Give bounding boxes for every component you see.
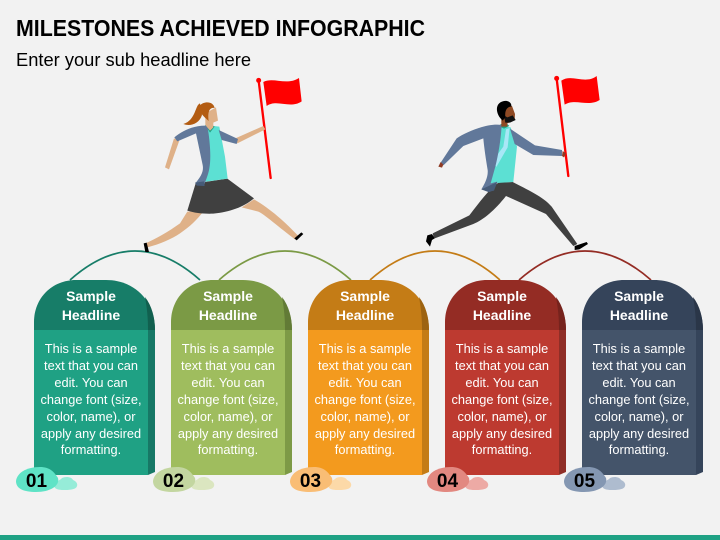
body text 02: text that you can	[181, 358, 275, 373]
body text 01: apply any desired	[41, 426, 141, 441]
number badge 05: 05	[574, 471, 595, 492]
panel: card 05	[582, 280, 703, 475]
body text 05: color, name), or	[595, 409, 684, 424]
heading 02: Headline	[199, 307, 257, 323]
body text 05: formatting.	[609, 442, 669, 457]
body text 02: formatting.	[198, 442, 258, 457]
arc connectors	[70, 251, 651, 280]
body text 03: formatting.	[335, 442, 395, 457]
body text 02: color, name), or	[184, 409, 273, 424]
heading 01: Headline	[62, 307, 120, 323]
body text 05: edit. You can	[602, 375, 676, 390]
figure: woman with flag	[144, 78, 303, 252]
heading 02: Sample	[203, 288, 253, 304]
number badge 04	[427, 467, 488, 492]
number badge 03: 03	[300, 471, 321, 492]
body text 02: apply any desired	[178, 426, 278, 441]
body text 01: color, name), or	[47, 409, 136, 424]
body text 04: color, name), or	[458, 409, 547, 424]
figure: man with flag	[426, 76, 600, 250]
heading 01: Sample	[66, 288, 116, 304]
heading 05: Sample	[614, 288, 664, 304]
body text 01: This is a sample	[45, 341, 137, 356]
heading 03: Sample	[340, 288, 390, 304]
body text 04: change font (size,	[451, 392, 553, 407]
body text 03: This is a sample	[319, 341, 411, 356]
body text 01: formatting.	[61, 442, 121, 457]
body text 02: This is a sample	[182, 341, 274, 356]
body text 01: change font (size,	[40, 392, 142, 407]
number badge 01	[16, 467, 77, 492]
heading 04: Headline	[473, 307, 531, 323]
body text 04: This is a sample	[456, 341, 548, 356]
number badge 01: 01	[26, 471, 47, 492]
number badge 03	[290, 467, 351, 492]
number badge 02	[153, 467, 214, 492]
body text 01: edit. You can	[54, 375, 128, 390]
footer bar	[0, 535, 720, 540]
subtitle: Enter your sub headline here	[16, 50, 251, 70]
number badge 05	[564, 467, 625, 492]
panel: card 04	[445, 280, 566, 475]
body text 03: text that you can	[318, 358, 412, 373]
body text 02: edit. You can	[191, 375, 265, 390]
body text 03: edit. You can	[328, 375, 402, 390]
body text 05: change font (size,	[588, 392, 690, 407]
panel: card 03	[308, 280, 429, 475]
body text 03: color, name), or	[321, 409, 410, 424]
body text 03: apply any desired	[315, 426, 415, 441]
body text 05: This is a sample	[593, 341, 685, 356]
panel: card 01	[34, 280, 155, 475]
heading 03: Headline	[336, 307, 394, 323]
body text 01: text that you can	[44, 358, 138, 373]
body text 02: change font (size,	[177, 392, 279, 407]
body text 04: text that you can	[455, 358, 549, 373]
body text 05: apply any desired	[589, 426, 689, 441]
body text 05: text that you can	[592, 358, 686, 373]
heading 04: Sample	[477, 288, 527, 304]
body text 04: formatting.	[472, 442, 532, 457]
number badge 02: 02	[163, 471, 184, 492]
number badge 04: 04	[437, 471, 458, 492]
heading 05: Headline	[610, 307, 668, 323]
body text 04: edit. You can	[465, 375, 539, 390]
body text 04: apply any desired	[452, 426, 552, 441]
body text 03: change font (size,	[314, 392, 416, 407]
title: MILESTONES ACHIEVED INFOGRAPHIC	[16, 15, 425, 41]
panel: card 02	[171, 280, 292, 475]
